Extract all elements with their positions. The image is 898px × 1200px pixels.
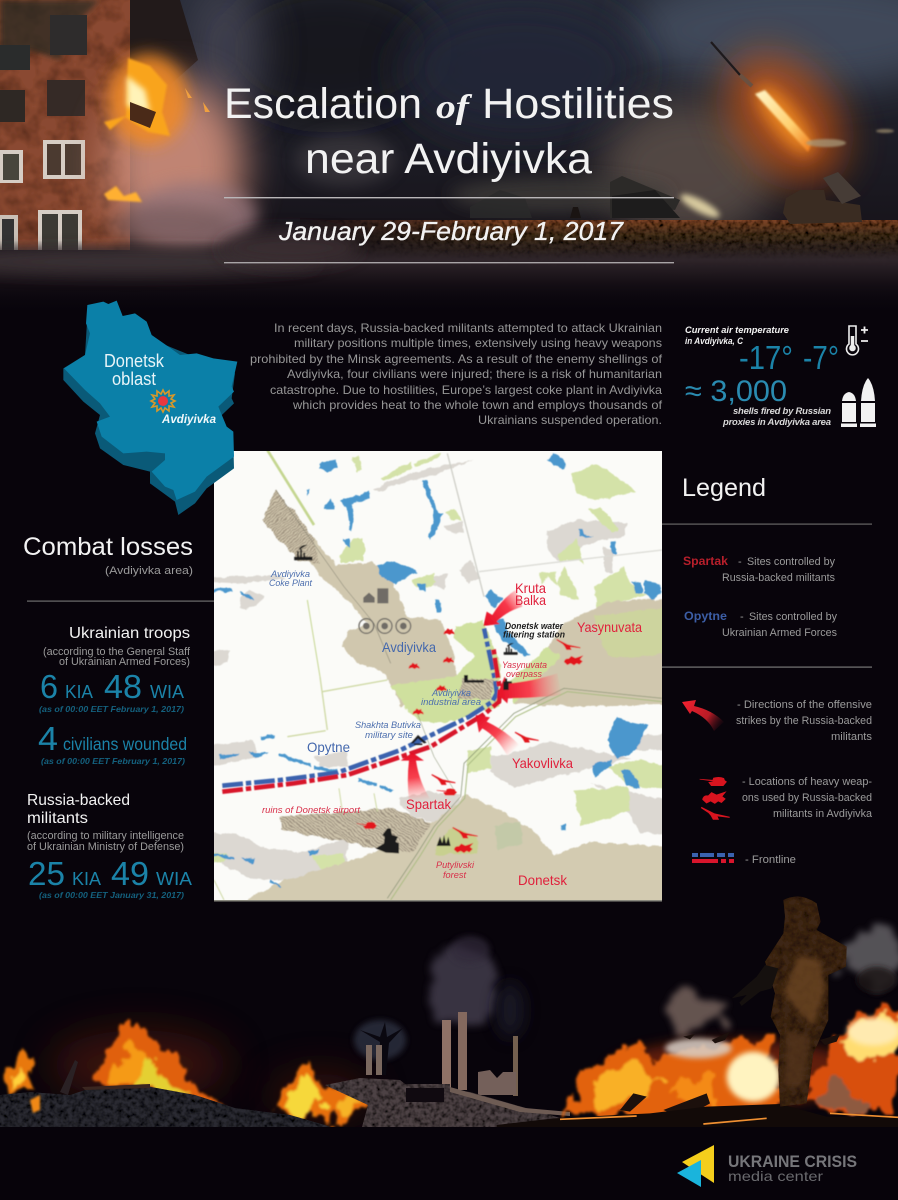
map labels: Donetsk	[518, 872, 568, 888]
map labels: Balka	[515, 592, 546, 608]
legend: Spartak: Spartak	[683, 554, 728, 568]
legend: directions text: strikes by the Russia-backed	[736, 715, 872, 727]
legend: Spartak: -	[738, 556, 742, 568]
stats: temperature: -7°	[803, 339, 839, 376]
map labels	[262, 569, 642, 888]
Ukrainian troops	[39, 625, 191, 714]
map labels: forest	[443, 870, 466, 881]
debris pile	[0, 1085, 330, 1127]
icon: offensive arrow	[682, 700, 724, 731]
logo: media center	[728, 1168, 823, 1184]
intro text: Avdiyivka, four civilians were injured; there is a risk of humanitarian	[287, 367, 662, 381]
frontline blue	[222, 628, 497, 786]
map labels: Kruta	[515, 580, 546, 596]
heading: combat losses	[23, 533, 193, 577]
legend: directions text: - Directions of the offensive	[737, 699, 872, 711]
icon: frontline	[692, 855, 735, 861]
Donetsk	[248, 794, 662, 900]
legend: Opytne	[684, 609, 837, 639]
Ukrainian troops: WIA	[150, 682, 184, 702]
map labels: Opytne	[307, 739, 350, 755]
civilians wounded: (as of 00:00 EET February 1, 2017)	[41, 756, 185, 766]
Ukrainian troops: KIA	[65, 682, 93, 702]
grey map icons	[359, 588, 411, 633]
heading: combat losses: Combat losses	[23, 533, 193, 561]
Russia-backed militants: KIA	[72, 869, 101, 889]
legend: weapons text: militants in Avdiyivka	[773, 808, 873, 820]
date: January 29-February 1, 2017	[278, 216, 625, 246]
map labels: overpass	[506, 669, 542, 680]
bottom scene: factory	[325, 936, 570, 1127]
Russia-backed militants	[27, 792, 192, 900]
legend: frontline text: - Frontline	[745, 854, 796, 866]
icon: thermometer	[847, 326, 868, 355]
attack arrow: Yakovlivka	[476, 715, 519, 756]
Ukrainian troops: 48	[104, 668, 142, 705]
Avdiyivka town and coke plant	[309, 537, 458, 708]
logo: UKRAINE CRISIS	[728, 1152, 857, 1171]
panel: combat losses	[23, 533, 214, 900]
burning apartment building	[0, 0, 198, 250]
intro text: prohibited by the Minsk agreements. As a result of the enemy shellings of	[250, 352, 663, 366]
map labels: Putylivski	[436, 860, 475, 871]
bottom scene: right fire	[497, 928, 898, 1137]
civilians wounded: civilians wounded	[63, 734, 187, 754]
Russia-backed militants: (as of 00:00 EET January 31, 2017)	[39, 890, 184, 900]
legend: Spartak	[683, 554, 835, 584]
Ukrainian troops: (as of 00:00 EET February 1, 2017)	[39, 704, 184, 714]
bottom scene: left fires	[0, 1015, 376, 1127]
map labels: Yasynuvata	[502, 660, 547, 671]
oblast extruded side	[63, 313, 235, 515]
intro text: military positions multiple times, extensively using heavy weapons	[294, 336, 662, 350]
legend: Spartak: Russia-backed militants	[722, 572, 835, 584]
Ukrainian troops: Ukrainian troops	[69, 625, 190, 642]
map icons	[294, 545, 518, 853]
Russia-backed militants: WIA	[156, 869, 192, 889]
land use	[201, 460, 681, 882]
title: of	[436, 89, 473, 126]
stats: temperature: -17°	[739, 339, 793, 376]
Russia-backed militants: (according to military intelligence	[27, 830, 184, 842]
intro text: Ukrainians suspended operation.	[478, 413, 662, 427]
map labels: Avdiyivka	[270, 569, 310, 579]
Russia-backed militants: 25	[28, 855, 65, 892]
attack arrow: Spartak	[400, 753, 428, 800]
intro text: catastrophe. Due to hostilities, Europe’s largest coke plant in Avdiyivka	[270, 383, 662, 397]
stats: shells	[685, 375, 876, 428]
map labels: Coke Plant	[269, 578, 312, 588]
ground strip	[0, 1127, 898, 1200]
intro text: In recent days, Russia-backed militants attempted to attack Ukrainian	[274, 321, 662, 335]
legend: weapons text: - Locations of heavy weap-	[742, 776, 872, 788]
Ukrainian troops: 6	[40, 668, 58, 705]
stats: shells: proxies in Avdiyivka area	[722, 417, 831, 428]
green areas	[201, 452, 681, 873]
soldier silhouette	[732, 897, 847, 1107]
stats: temperature	[685, 325, 868, 376]
map labels: ruins of Donetsk airport	[262, 805, 360, 816]
legend: directions text	[736, 699, 873, 743]
civilians wounded	[38, 720, 187, 766]
attack arrow: Kruta Balka	[483, 590, 522, 626]
Russia-backed militants: 49	[111, 855, 149, 892]
header photo collage	[0, 0, 898, 310]
legend: weapons text	[742, 776, 873, 820]
oblast map: oblast	[112, 369, 156, 389]
title rule top	[224, 197, 674, 198]
map labels: Shakhta Butivka	[355, 720, 421, 730]
field and launcher trucks	[300, 172, 898, 274]
Russia-backed militants: of Ukrainian Ministry of Defense)	[27, 841, 184, 853]
legend: Opytne: Ukrainian Armed Forces	[722, 627, 837, 639]
logo	[677, 1145, 857, 1187]
oblast top surface	[64, 301, 237, 500]
title: Hostilities	[482, 80, 674, 128]
Ukrainian troops: (according to the General Staff	[43, 646, 191, 658]
Russia-backed militants: militants	[27, 810, 88, 827]
stats: temperature: in Avdiyivka, C	[685, 336, 743, 347]
legend: Spartak: Sites controlled by	[747, 556, 835, 568]
red weapons	[357, 628, 583, 853]
building smoke and flames	[104, 54, 257, 250]
oblast map: Avdiyivka	[161, 414, 217, 426]
stats: temperature: Current air temperature	[685, 325, 790, 336]
water	[201, 453, 661, 888]
legend: Opytne: -	[740, 611, 744, 623]
attack arrow: Yasynuvata overpass	[497, 673, 561, 703]
frontline red	[222, 648, 500, 792]
map labels: Yasynuvata	[577, 619, 642, 635]
legend: Opytne: Opytne	[684, 609, 727, 623]
map labels: Spartak	[406, 796, 452, 812]
map labels: Yakovlivka	[512, 755, 573, 771]
roads and rail	[214, 450, 662, 900]
icon: bare tree	[360, 1022, 403, 1075]
intro text	[250, 321, 663, 427]
stats: shells: shells fired by Russian	[733, 406, 831, 417]
icon: shells	[841, 378, 876, 427]
title: Escalation	[224, 80, 422, 128]
icon: heavy weapons	[700, 777, 730, 820]
Yasynuvata	[514, 598, 681, 707]
oblast map	[63, 301, 237, 515]
map labels: filtering station	[503, 630, 565, 640]
map labels: Donetsk water	[505, 621, 563, 631]
map labels: industrial area	[421, 697, 481, 707]
map labels: military site	[365, 730, 413, 740]
intro text: which provides heat to the whole town and employs thousands of	[292, 398, 663, 412]
oblast map: Donetsk	[104, 351, 165, 371]
panel: legend	[662, 474, 873, 866]
map labels: Avdiyivka	[382, 639, 436, 655]
smoke band under header	[0, 230, 898, 305]
Ukrainian troops: of Ukrainian Armed Forces)	[59, 656, 190, 668]
map labels: Avdiyivka	[431, 688, 471, 698]
map of the conflict area	[214, 451, 662, 902]
legend: Opytne: Sites controlled by	[749, 611, 837, 623]
icon: Avdiyivka explosion marker	[151, 390, 175, 412]
legend: directions text: militants	[831, 731, 873, 743]
airport and forest	[281, 808, 431, 852]
title: near Avdiyivka	[305, 135, 592, 183]
legend: weapons text: ons used by Russia-backed	[742, 792, 872, 804]
title	[224, 80, 674, 183]
icon: UCMC triangles	[677, 1145, 714, 1187]
Russia-backed militants: Russia-backed	[27, 792, 130, 809]
title rule bottom	[224, 262, 674, 263]
civilians wounded: 4	[38, 720, 58, 757]
legend heading: Legend	[682, 474, 766, 502]
industrial green belt	[391, 620, 501, 722]
heading: combat losses: (Avdiyivka area)	[105, 565, 193, 577]
stats: shells: ≈ 3,000	[685, 375, 787, 408]
rocket launch	[703, 32, 894, 204]
